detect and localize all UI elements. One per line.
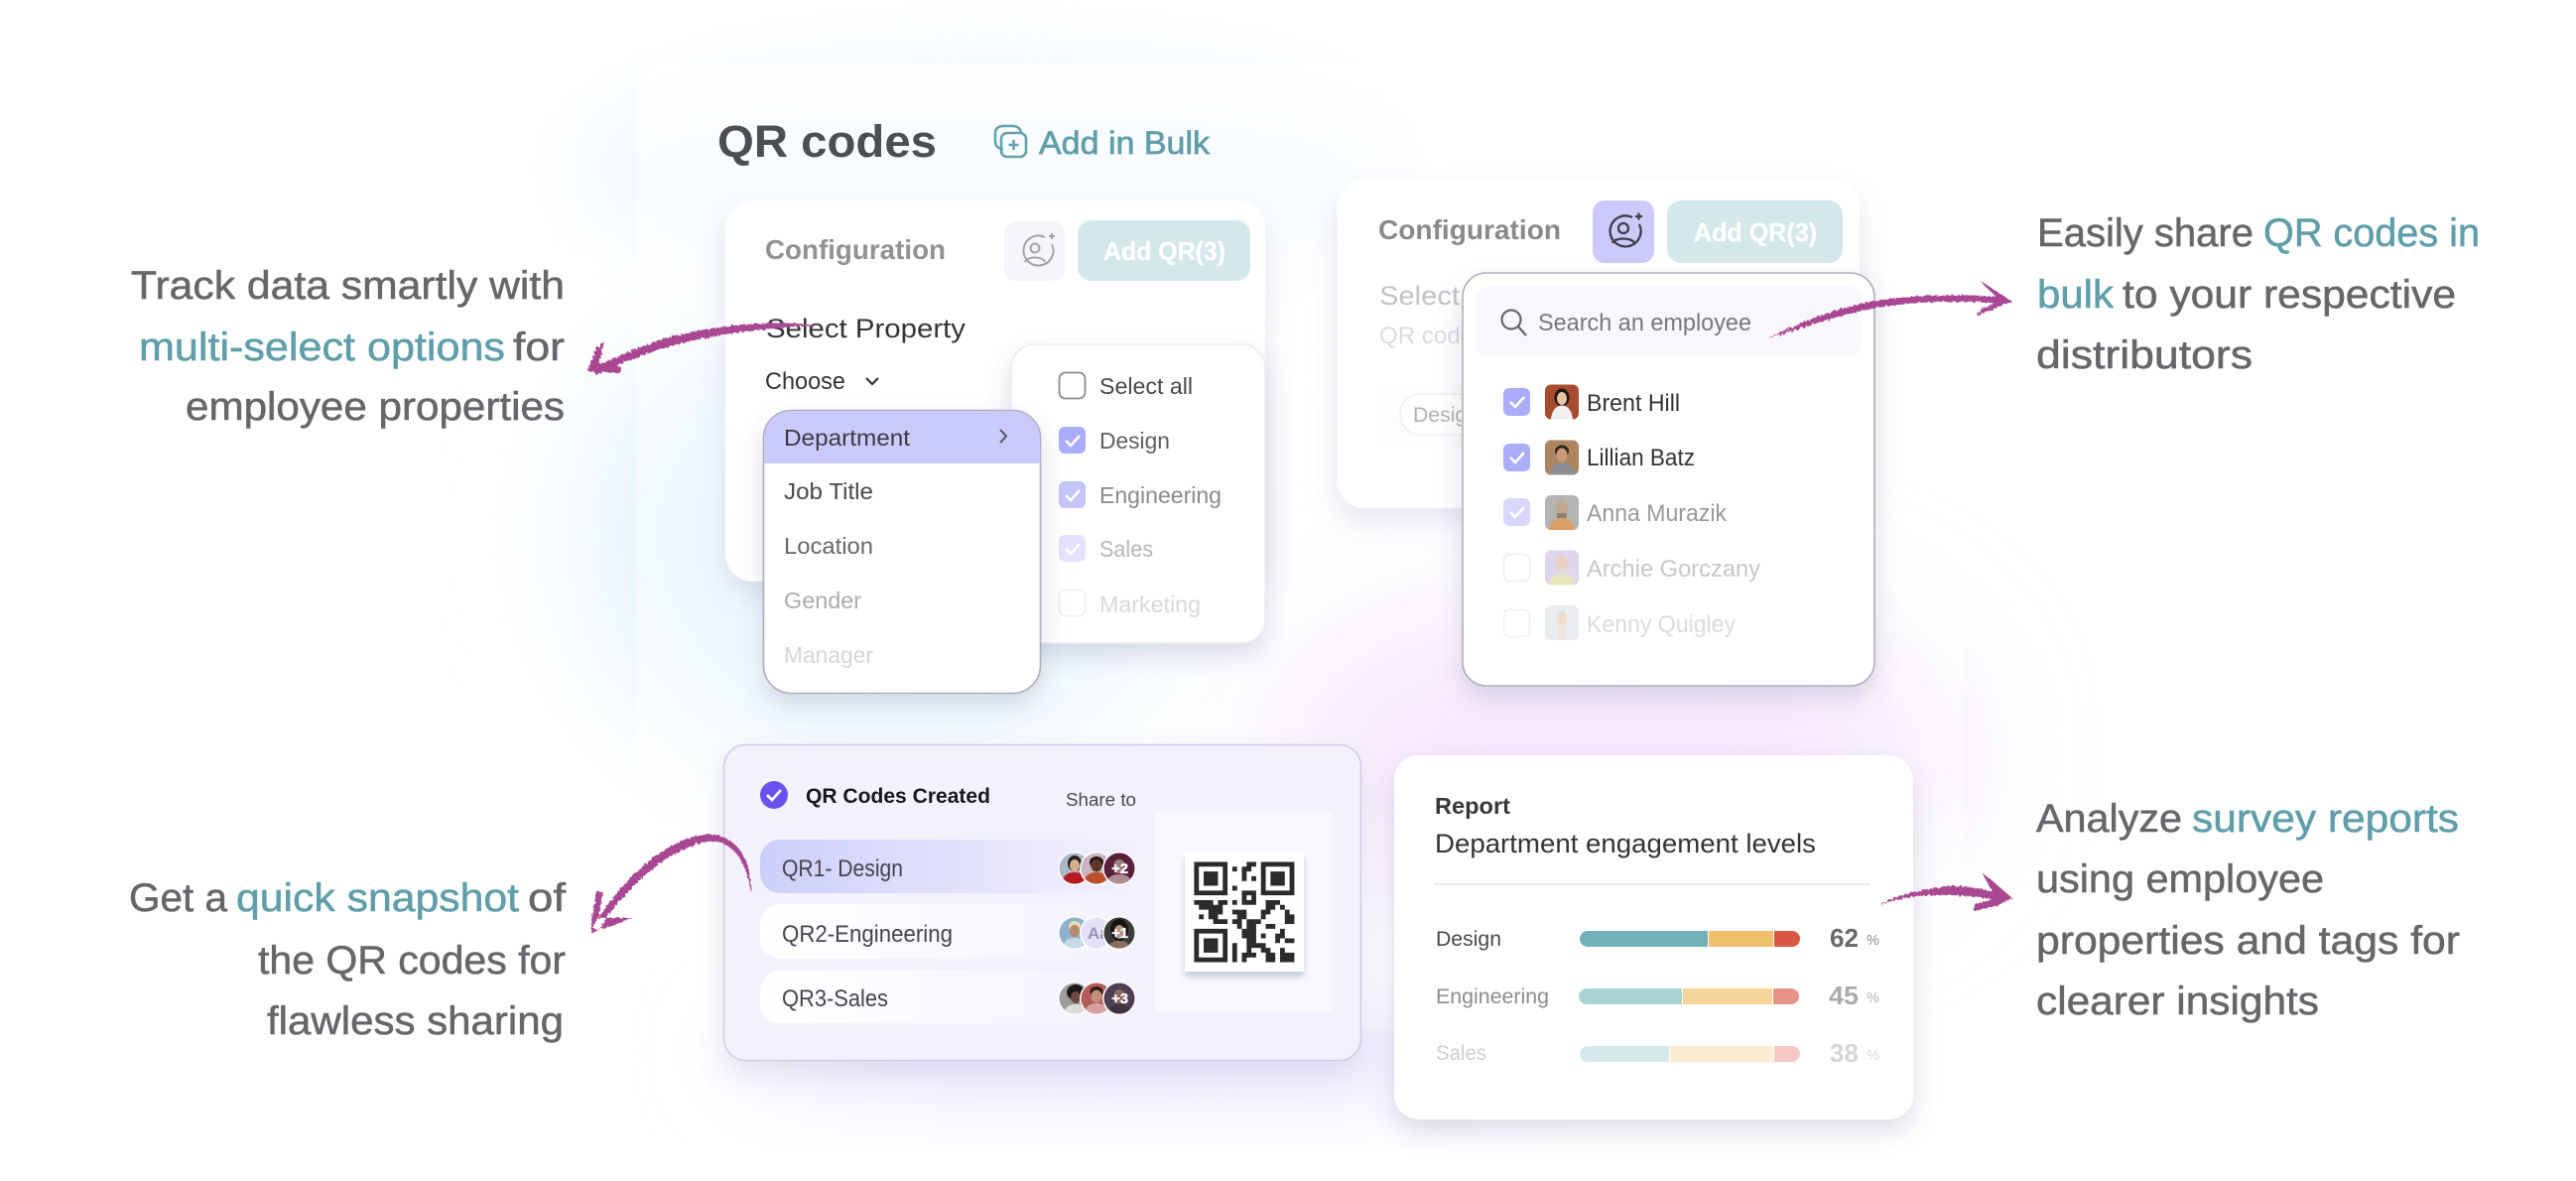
label: Select: Select (1379, 281, 1461, 311)
row: QR2 Engineering: QR2-Engineering (782, 921, 953, 948)
chart row: Sales 38%: Sales (1436, 1042, 1486, 1065)
panel: property dropdown (764, 411, 1040, 693)
chart row: Design 62%: 62 (1830, 923, 1859, 953)
row: QR3 Sales: QR3-Sales (782, 985, 888, 1012)
option: Sales (1059, 535, 1153, 562)
chart row: Sales 38%: 38 (1830, 1038, 1859, 1068)
callout: multi-select options: employee properties (186, 385, 565, 429)
option: Sales: Sales (1099, 536, 1153, 562)
label: Choose: Choose (765, 368, 845, 395)
option: Engineering: Engineering (1099, 482, 1222, 508)
panel: QR codes created (724, 744, 1361, 1060)
chip: Design: Design (1413, 404, 1479, 427)
arrow: to multi-select callout (587, 323, 816, 375)
button: Add QR: Add QR(3) (1694, 217, 1817, 247)
employee row: Kenny Quigley: Kenny Quigley (1587, 611, 1736, 638)
panel: configuration card left (725, 200, 1265, 582)
arrow: to share callout (1768, 281, 2012, 338)
chart row: Engineering 45%: 45 (1829, 981, 1859, 1010)
employee row: Brent Hill (1503, 385, 1680, 419)
link: Add in Bulk: Add in Bulk (1039, 125, 1211, 161)
chart row: Sales 38% (1436, 1038, 1879, 1068)
menu item: Location: Location (784, 533, 873, 559)
employee row: Kenny Quigley (1504, 605, 1736, 640)
callout: share in bulk: distributors (2036, 333, 2253, 377)
button: Add QR (1667, 200, 1843, 263)
card title: Configuration (1378, 214, 1561, 245)
panel: employee search popup (1463, 273, 1874, 686)
employee row: Anna Murazik: Anna Murazik (1587, 500, 1728, 527)
heading: Department engagement levels: Department engagement levels (1435, 829, 1816, 858)
callout: multi-select options: for (513, 326, 565, 369)
panel: main backdrop (636, 65, 1963, 1030)
panel: report (1394, 755, 1913, 1119)
option: Select all (1060, 373, 1193, 399)
label: Select Property: Select Property (766, 314, 966, 343)
avatars: row 1 (1058, 852, 1136, 885)
callout: survey reports (2036, 797, 2460, 1023)
employee row: Archie Gorczany (1504, 550, 1760, 586)
callout: multi-select options: Track data smartly with (131, 264, 565, 308)
callout: share in bulk (2036, 211, 2480, 377)
callout: survey reports: survey reports (2192, 797, 2459, 841)
heading: QR Codes Created: QR Codes Created (806, 785, 990, 808)
icon: check circle (760, 781, 788, 809)
icon: add employee muted (1004, 221, 1065, 281)
QR code preview (1155, 811, 1333, 1012)
option: Select all: Select all (1099, 373, 1193, 399)
menu item: Gender: Gender (784, 588, 861, 613)
chart row: Engineering 45% (1436, 981, 1879, 1010)
card title: Configuration (765, 234, 946, 265)
option: Design: Design (1099, 428, 1170, 454)
callout: quick snapshot: flawless sharing (267, 999, 564, 1043)
icon: chevron down (866, 378, 878, 384)
avatars: row 2: +1 (1111, 925, 1128, 942)
menu item: Department highlighted (764, 411, 1040, 463)
callout: share in bulk: to your respective (2123, 273, 2456, 317)
search field: Search an employee (1538, 310, 1751, 336)
callout: quick snapshot (129, 876, 567, 1043)
callout: survey reports: using employee (2036, 857, 2324, 901)
avatars: row 2: Aa (1088, 924, 1109, 943)
button: Add QR (1078, 220, 1250, 281)
callout: share in bulk: QR codes in (2263, 211, 2480, 255)
callout: share in bulk: bulk (2037, 273, 2115, 317)
employee row: Archie Gorczany: Archie Gorczany (1587, 556, 1760, 583)
row: QR1 Design (760, 840, 1142, 893)
callout: multi-select options (131, 264, 565, 429)
chip: Design (1383, 385, 1489, 448)
menu item: Department highlighted: Department (784, 425, 910, 451)
employee row: Brent Hill: Brent Hill (1587, 390, 1680, 417)
menu item: Job Title: Job Title (784, 478, 873, 504)
heading: QR codes: QR codes (717, 116, 937, 167)
callout: quick snapshot: Get a (129, 876, 228, 920)
avatars: row 3 (1058, 982, 1136, 1015)
label: Share to: Share to (1066, 789, 1136, 810)
button: Add QR: Add QR(3) (1103, 236, 1225, 266)
callout: quick snapshot: quick snapshot (236, 876, 519, 920)
option: Design (1059, 427, 1170, 454)
avatars: row 1: +2 (1111, 860, 1128, 877)
icon: add in bulk (995, 126, 1026, 157)
chart row: Sales 38%: % (1867, 1047, 1879, 1064)
callout: quick snapshot: of (528, 876, 567, 920)
background glow (576, 60, 1945, 1102)
chart row: Design 62% (1436, 923, 1879, 953)
avatars: row 2 (1058, 916, 1136, 950)
label: Report: Report (1435, 793, 1510, 819)
option: Marketing: Marketing (1099, 591, 1201, 617)
callout: quick snapshot: the QR codes for (258, 939, 566, 983)
chart row: Design 62%: Design (1436, 928, 1501, 951)
chart row: Design 62%: % (1867, 932, 1879, 949)
employee row: Lillian Batz: Lillian Batz (1587, 445, 1695, 471)
row: QR1 Design: QR1- Design (782, 855, 903, 882)
callout: multi-select options: multi-select options (139, 326, 505, 369)
employee row: Anna Murazik (1503, 495, 1728, 530)
label: QR code: QR code (1379, 323, 1474, 349)
row: QR2 Engineering (760, 904, 1142, 959)
callout: survey reports: properties and tags for (2036, 919, 2460, 963)
employee row: Lillian Batz (1503, 441, 1695, 474)
chart row: Engineering 45%: Engineering (1436, 985, 1549, 1008)
panel: department values dropdown (1011, 344, 1265, 643)
callout: share in bulk: Easily share (2037, 211, 2254, 255)
row: QR3 Sales (760, 971, 1142, 1023)
callout: survey reports: clearer insights (2036, 980, 2319, 1023)
search field (1476, 287, 1862, 355)
icon: add employee active (1593, 200, 1654, 263)
avatars: row 3: +3 (1111, 990, 1128, 1007)
arrow: to survey callout (1879, 873, 2012, 911)
arrow: to quick snapshot callout (591, 835, 751, 933)
menu item: Manager: Manager (784, 642, 873, 668)
divider (1435, 883, 1869, 885)
option: Marketing (1060, 590, 1201, 617)
chart row: Engineering 45%: % (1867, 989, 1879, 1006)
callout: survey reports: Analyze (2036, 797, 2182, 841)
panel: configuration card right (1338, 180, 1860, 508)
